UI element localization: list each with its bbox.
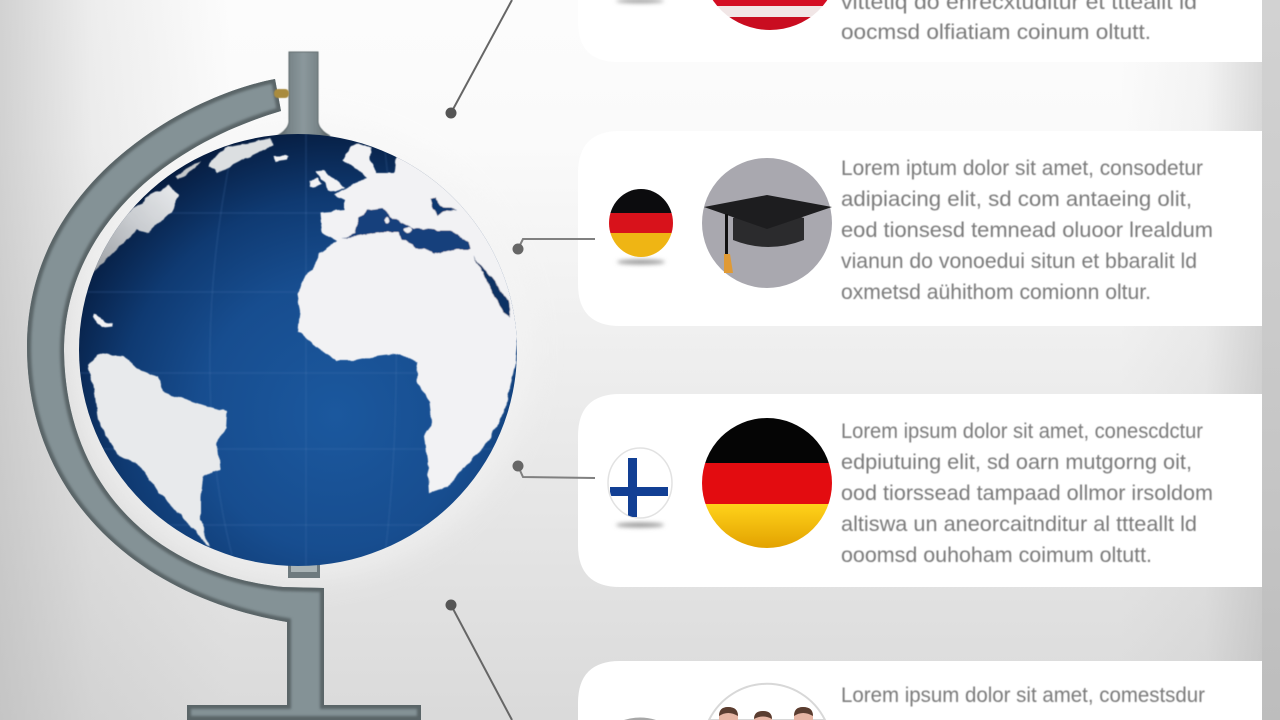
panel: card 4 bbox=[578, 661, 1262, 720]
Arctic sliver bbox=[175, 160, 200, 180]
Iceland bbox=[274, 156, 289, 162]
Black Sea bbox=[430, 198, 457, 217]
icon: German flag large bbox=[700, 418, 835, 549]
card 2 text: eod tionsesd temnead oluoor lrealdum bbox=[841, 219, 1213, 242]
North America bbox=[94, 184, 180, 273]
card 3 background bbox=[578, 394, 1262, 587]
card 3 text: Lorem ipsum dolor sit amet, conescdctur bbox=[841, 420, 1203, 443]
Greenland bbox=[208, 139, 272, 172]
Sicily bbox=[404, 228, 412, 232]
card 2 text: Lorem iptum dolor sit amet, consodetur bbox=[841, 157, 1203, 180]
card 2 text: adipiacing elit, sd com antaeing olit, bbox=[841, 188, 1192, 211]
globe grid bbox=[80, 134, 517, 566]
panel: card 2 bbox=[578, 131, 1262, 326]
card 3 text: ood tiorssead tampaad ollmor irsoldom bbox=[841, 482, 1213, 505]
card 3 text: edpiutuing elit, sd oarn mutgorng oit, bbox=[841, 451, 1192, 474]
globe sphere bbox=[79, 134, 517, 566]
bottom nub bbox=[288, 563, 320, 578]
east limb bbox=[474, 256, 511, 318]
gold pivot bbox=[274, 89, 289, 98]
continents bbox=[80, 139, 530, 547]
card 3 flag shadow bbox=[616, 522, 664, 528]
Italy bbox=[412, 228, 416, 230]
panel: card 3 bbox=[578, 394, 1262, 587]
icon: Finnish flag small bbox=[608, 448, 672, 518]
connector: middle upper bbox=[512, 239, 595, 254]
stand with arc, column and base bbox=[27, 79, 421, 720]
globe on stand bbox=[0, 52, 530, 720]
card 4 text: Lorem ipsum dolor sit amet, comestsdur bbox=[841, 684, 1205, 707]
card 2 flag shadow bbox=[617, 260, 665, 264]
connector: top bbox=[446, 0, 512, 118]
top pole bbox=[277, 52, 330, 136]
card 2 text: oxmetsd aühithom comionn oltur. bbox=[841, 281, 1151, 304]
icon: people circle bbox=[709, 684, 825, 720]
connector: middle lower bbox=[512, 460, 595, 478]
card 2 text bbox=[841, 157, 1213, 304]
panel: card 1 bbox=[578, 0, 1262, 62]
card 1 text bbox=[841, 0, 1197, 44]
Britain bbox=[315, 170, 345, 192]
card 2 background bbox=[578, 131, 1262, 326]
icon: German flag small bbox=[609, 189, 673, 257]
icon: graduation cap bbox=[702, 158, 832, 288]
card 3 text: ooomsd ouhoham coimum oltutt. bbox=[841, 544, 1152, 567]
South America bbox=[88, 354, 227, 547]
connector: bottom bbox=[446, 600, 512, 720]
icon: striped flag circle bbox=[712, 0, 828, 30]
Ireland bbox=[309, 178, 322, 187]
card 1 flag shadow bbox=[616, 0, 664, 3]
icon: small flag top bbox=[624, 718, 656, 720]
card 3 text: altiswa un aneorcaitnditur al ttteallt ld bbox=[841, 513, 1197, 536]
card 1 text: oocmsd olfiatiam coinum oltutt. bbox=[841, 21, 1151, 44]
Caribbean bbox=[93, 314, 113, 327]
Africa and Eurasia bbox=[297, 143, 530, 494]
Mediterranean bbox=[343, 208, 470, 254]
card 3 text bbox=[841, 420, 1213, 567]
card 1 background bbox=[578, 0, 1262, 62]
card 2 text: vianun do vonoedui situn et bbaralit ld bbox=[841, 250, 1197, 273]
Corsica bbox=[384, 216, 390, 224]
card 4 background bbox=[578, 661, 1262, 720]
